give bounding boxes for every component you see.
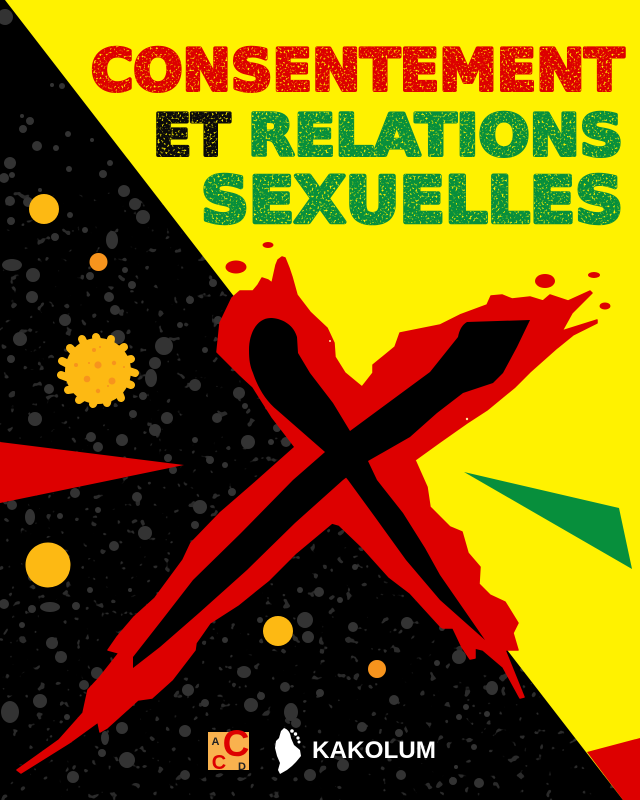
icon: virus xyxy=(61,337,135,404)
big X mark xyxy=(17,242,610,773)
circle: yellow centre xyxy=(263,616,293,646)
red corner triangle xyxy=(587,738,640,800)
title line: sexuelles: SEXUELLES xyxy=(201,164,623,237)
logo: ACCD: C xyxy=(212,752,226,774)
logo: ACCD xyxy=(208,723,249,774)
black X arm falling to the right xyxy=(249,318,485,640)
title line: consentement: CONSENTEMENT xyxy=(91,38,624,104)
red splash outline xyxy=(17,257,597,773)
black X arm rising to the right xyxy=(133,320,530,668)
red splash drops xyxy=(226,242,610,310)
red left triangle xyxy=(0,442,184,503)
circle: yellow lower left xyxy=(26,542,70,588)
circle: yellow top xyxy=(29,194,59,224)
logo: ACCD: D xyxy=(238,761,246,773)
title word: relations: RELATIONS xyxy=(248,103,623,169)
title word: et: ET xyxy=(153,103,230,169)
logo: Kakolum xyxy=(275,728,436,774)
circle: orange lower xyxy=(368,660,386,678)
icon: foot Africa xyxy=(275,728,301,774)
wordmark: KAKOLUM xyxy=(312,737,436,764)
yellow flecks xyxy=(329,340,468,420)
logo: ACCD: A xyxy=(212,736,220,748)
logo: ACCD: C xyxy=(223,723,249,764)
title xyxy=(91,38,624,237)
circle: orange top xyxy=(90,253,108,271)
green triangle xyxy=(464,472,632,569)
